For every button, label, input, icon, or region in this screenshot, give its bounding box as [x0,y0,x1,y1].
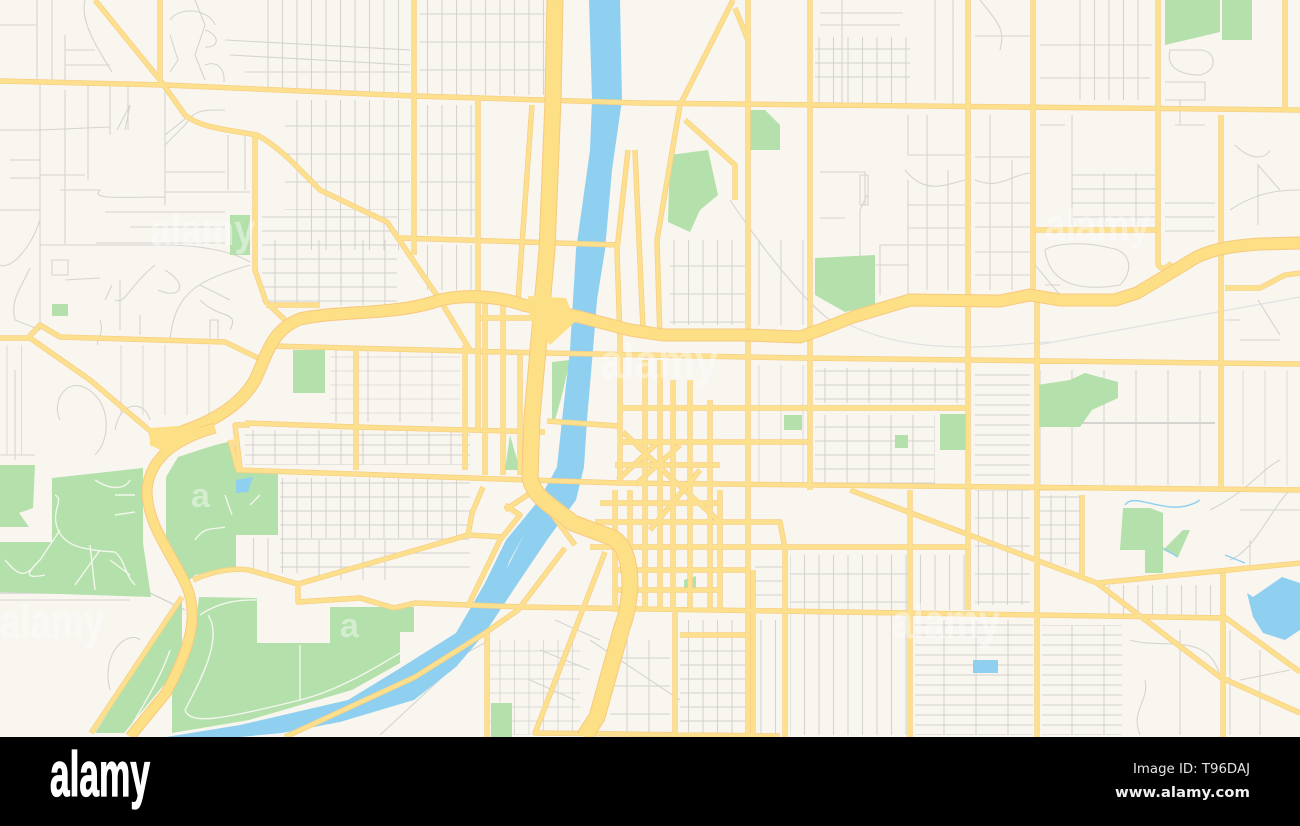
footer website: www.alamy.com [1115,785,1250,801]
highway: north-south [530,0,630,737]
watermark word: left: alamy [0,596,104,649]
watermark word: upper right: alamy [1045,201,1150,250]
river island [506,535,524,570]
watermark word: upper left: alamy [150,206,255,255]
park: highway strip [95,597,182,733]
pond [236,477,253,493]
park: south-east [1120,508,1190,573]
watermark letter: west park: a [191,477,211,515]
highway: east-west [150,243,1300,440]
park: north centre [668,150,718,232]
park trails [5,480,405,737]
park: far west large [0,468,151,597]
park: east small [784,414,968,450]
footer logo: alamy [50,740,150,810]
watermark letter: south park: a [340,607,360,645]
interchange centre [528,296,575,345]
footer bar [0,737,1300,826]
watermark word: centre: alamy [600,336,718,389]
park: centre east [815,255,875,312]
lake and ponds [236,477,1300,673]
faint watermarks [0,201,1150,649]
park: west small [52,215,325,393]
creek [1125,500,1245,563]
interchange west [150,424,205,452]
park: north small [750,110,780,150]
park: south [172,597,414,733]
park: west centre [166,442,278,587]
park: bottom [491,703,512,737]
highway: west [130,428,215,737]
footer image id: Image ID: T96DAJ [1133,762,1250,777]
small pool [973,660,998,673]
river [166,0,622,737]
park: north-east [1165,0,1252,45]
park: riverside [505,360,696,590]
lake [1247,577,1300,640]
watermark word: lower right: alamy [892,596,1000,649]
park: far west [0,465,35,527]
park: east [1037,373,1118,427]
